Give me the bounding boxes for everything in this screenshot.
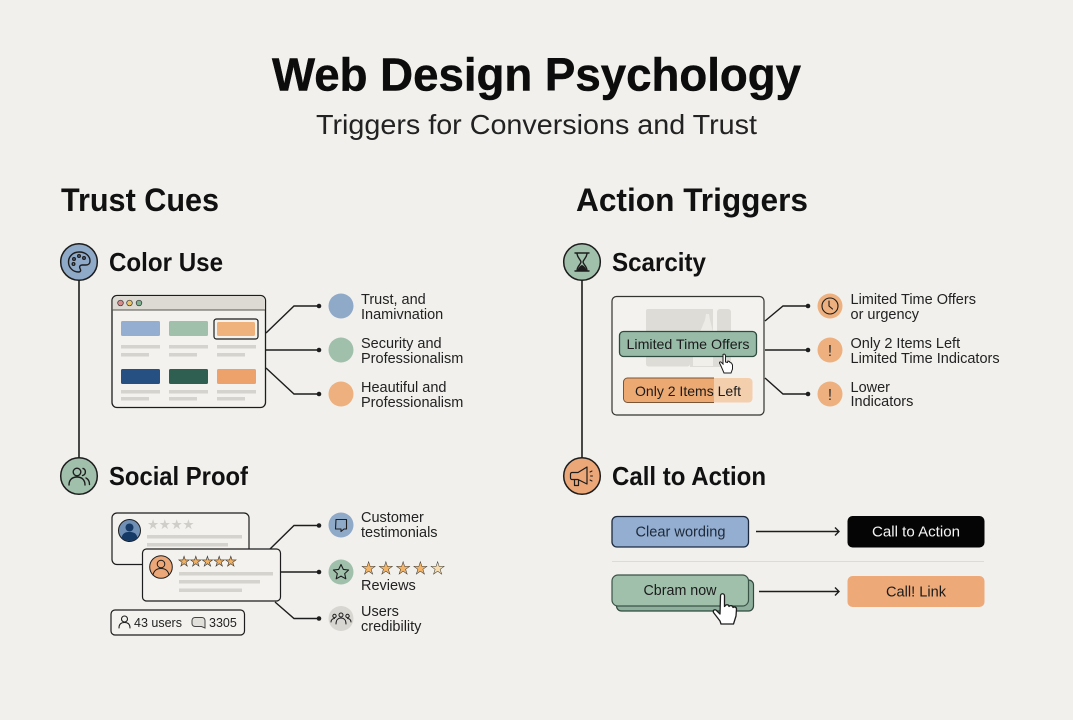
- heading: Social Proof: Social Proof: [109, 461, 248, 491]
- connector lines: [270, 523, 321, 621]
- heading: Trust Cues: Trust Cues: [61, 182, 219, 218]
- item: testimonials: testimonials: [361, 525, 438, 541]
- panel: Scarcity: [564, 244, 1000, 415]
- item: lower indicators: [818, 380, 913, 410]
- item: limited time offers: [818, 292, 976, 323]
- icon: megaphone: [564, 458, 600, 494]
- faded background product: [646, 309, 731, 367]
- icon: palette: [61, 244, 97, 280]
- item: lower indicators: Lower: [850, 380, 890, 396]
- panel: Call to Action: [564, 458, 984, 624]
- item: testimonials: [328, 510, 438, 541]
- icon: hand cursor: [720, 354, 732, 373]
- timeline connector: right: [581, 280, 583, 458]
- button: clear wording: [612, 516, 748, 547]
- arrow: [756, 528, 839, 536]
- button: only 2 items left: Only 2 Items Left: [635, 383, 741, 399]
- button: only 2 items left: [624, 378, 752, 402]
- button: call link: Call! Link: [886, 584, 947, 600]
- item: users: credibility: [361, 619, 422, 635]
- item: security: Security and: [361, 336, 442, 352]
- review card: back: [112, 513, 249, 564]
- item: trust: [328, 292, 443, 323]
- item: only 2 items left: Only 2 Items Left: [850, 336, 960, 352]
- heading: Call to Action: Call to Action: [612, 461, 766, 491]
- item: beautiful: [328, 380, 463, 411]
- icon: hourglass: [564, 244, 600, 280]
- arrow: [759, 588, 839, 596]
- item: trust: Trust, and: [361, 292, 426, 308]
- item: security: Professionalism: [361, 351, 463, 367]
- button: call to action: [848, 516, 984, 548]
- button: call link: [848, 576, 984, 607]
- subtitle: Triggers for Conversions and Trust: [316, 109, 757, 140]
- item: beautiful: Heautiful and: [361, 380, 446, 396]
- mockup: offer card: [612, 296, 764, 415]
- heading: Scarcity: Scarcity: [612, 247, 706, 277]
- heading: Color Use: Color Use: [109, 247, 223, 277]
- timeline connector: left: [78, 280, 80, 458]
- stats badge: 43 users: [134, 616, 182, 630]
- connector lines: [266, 304, 321, 396]
- item: lower indicators: !: [828, 387, 832, 404]
- item: reviews: [328, 559, 447, 594]
- panel: Color Use: [61, 244, 463, 411]
- panel: Social Proof: [61, 458, 447, 635]
- connector lines: [765, 304, 810, 396]
- item: testimonials: Customer: [361, 510, 424, 526]
- item: users: Users: [361, 604, 399, 620]
- review card: front: [142, 549, 280, 601]
- button: claim now: [612, 575, 754, 611]
- button: call to action: Call to Action: [872, 524, 960, 540]
- item: reviews: ★★★★★: [361, 559, 447, 578]
- item: limited time offers: Limited Time Offers: [850, 292, 976, 308]
- item: limited time offers: or urgency: [850, 307, 920, 323]
- item: lower indicators: Indicators: [850, 394, 913, 410]
- heading: Action Triggers: Action Triggers: [576, 182, 808, 218]
- item: trust: Inamivnation: [361, 307, 443, 323]
- item: reviews: Reviews: [361, 578, 416, 594]
- item: beautiful: Professionalism: [361, 395, 463, 411]
- item: only 2 items left: !: [828, 343, 832, 360]
- icon: hand cursor: [713, 594, 736, 624]
- title: Web Design Psychology: [272, 48, 801, 100]
- browser window mockup: [112, 296, 266, 408]
- button: limited time offers: [620, 332, 756, 356]
- divider: [612, 560, 984, 562]
- review card: front: ★★★★★: [178, 554, 237, 569]
- review card: back: ★★★★: [147, 517, 194, 532]
- item: security: [328, 336, 463, 367]
- item: users: [328, 604, 422, 635]
- item: only 2 items left: [818, 336, 1000, 367]
- icon: people: [61, 458, 97, 494]
- button: limited time offers: Limited Time Offers: [626, 336, 750, 352]
- stats badge: 3305: [209, 616, 237, 630]
- stats badge: [111, 610, 244, 635]
- button: clear wording: Clear wording: [636, 524, 726, 540]
- button: claim now: Cbram now: [644, 583, 717, 599]
- item: only 2 items left: Limited Time Indicators: [850, 351, 1000, 367]
